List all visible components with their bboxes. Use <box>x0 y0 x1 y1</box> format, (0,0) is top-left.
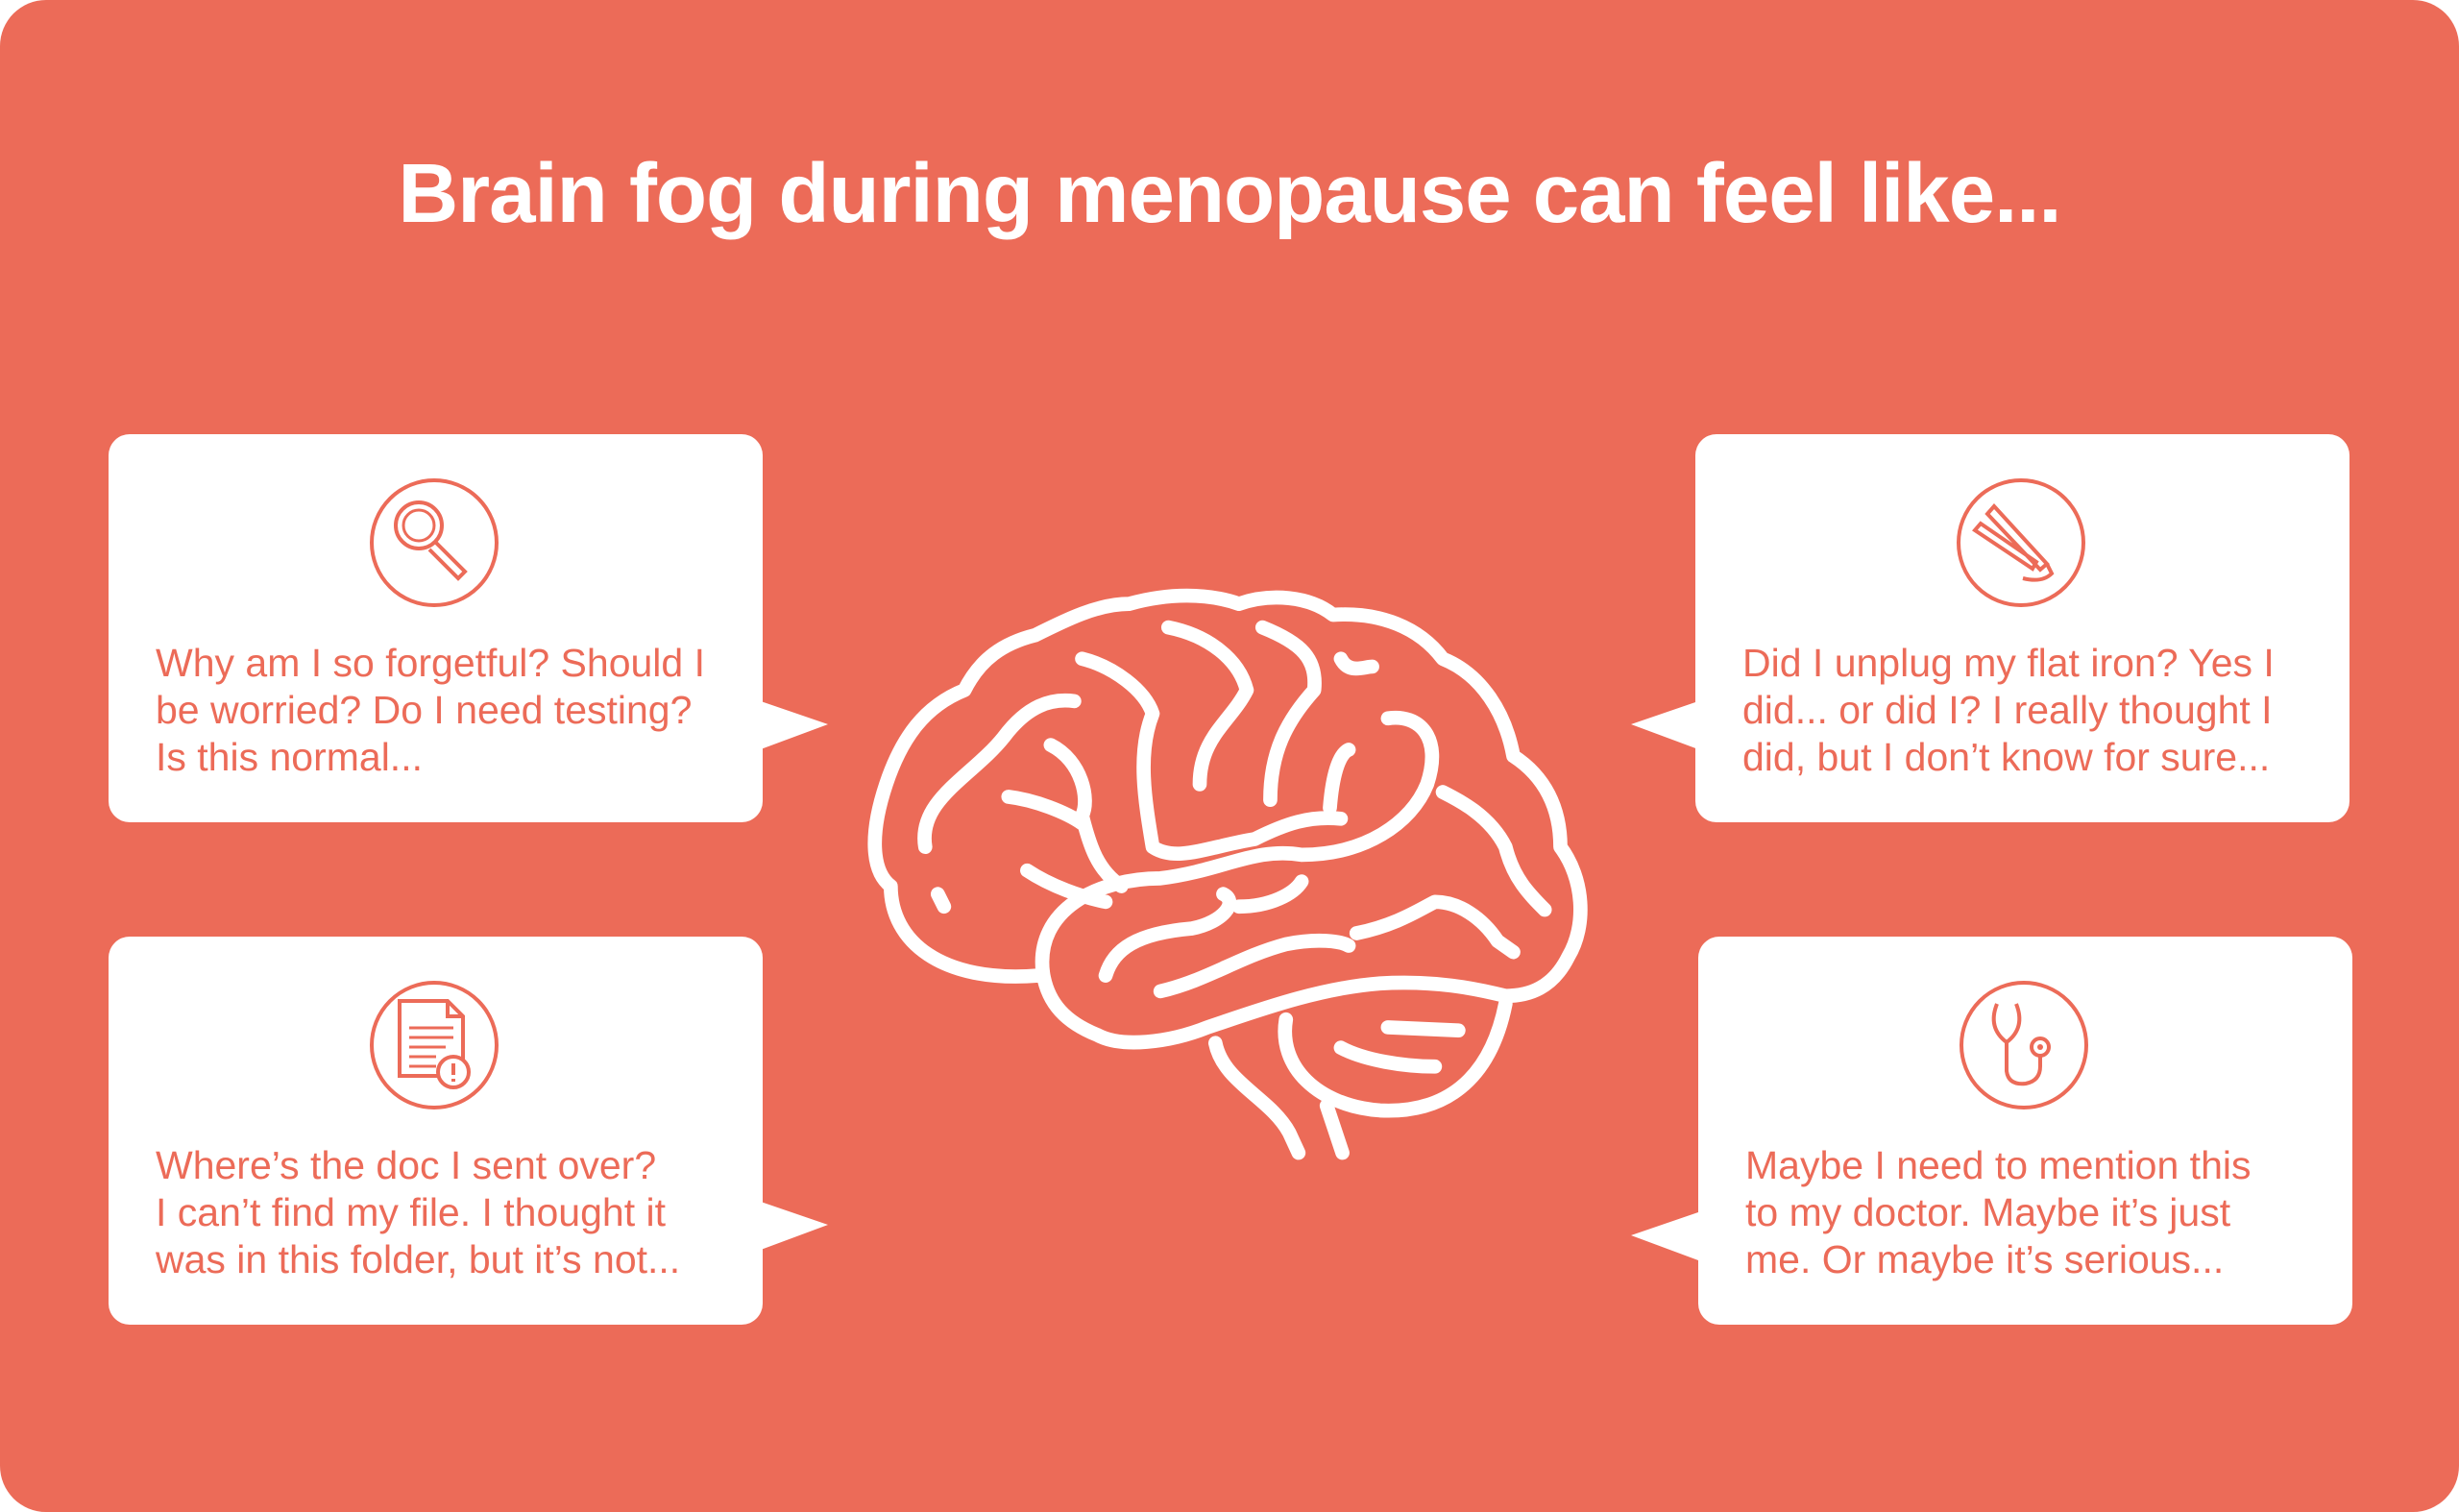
arrow: tail top-left <box>763 701 828 749</box>
text: flat iron: did... or did I? I really thought I <box>1742 688 2273 732</box>
title: Brain fog during menopause can feel like... <box>398 147 2061 240</box>
text: doctor: to my doctor. Maybe it’s just <box>1745 1190 2230 1234</box>
arrow: tail top-right <box>1631 702 1695 748</box>
icon: flat iron <box>1957 478 2085 607</box>
panel: flat iron <box>1695 434 2349 822</box>
panel: doc <box>109 937 763 1325</box>
text: doc: I can’t find my file. I thought it <box>156 1190 666 1234</box>
icon: stethoscope <box>1960 981 2088 1110</box>
text: doc: Where’s the doc I sent over? <box>156 1143 656 1187</box>
panel: doctor <box>1698 937 2352 1325</box>
text: flat iron <box>1742 641 2275 779</box>
text: forgetful <box>156 641 705 779</box>
text: flat iron: did, but I don’t know for sure... <box>1742 735 2270 779</box>
icon: document <box>370 981 499 1110</box>
text: forgetful: Is this normal... <box>156 735 423 779</box>
arrow: tail bottom-left <box>763 1203 828 1249</box>
text: doctor: Maybe I need to mention this <box>1745 1143 2251 1187</box>
panel: forgetful <box>109 434 763 822</box>
text: forgetful: be worried? Do I need testing? <box>156 688 692 732</box>
text: forgetful: Why am I so forgetful? Should I <box>156 641 705 685</box>
text: doctor <box>1745 1143 2251 1281</box>
arrow: tail bottom-right <box>1631 1212 1698 1260</box>
text: doctor: me. Or maybe it’s serious... <box>1745 1237 2224 1281</box>
text: doc <box>156 1143 680 1281</box>
icon: magnifying glass <box>370 478 499 607</box>
text: doc: was in this folder, but it’s not... <box>156 1237 680 1281</box>
text: flat iron: Did I unplug my flat iron? Yes I <box>1742 641 2275 685</box>
